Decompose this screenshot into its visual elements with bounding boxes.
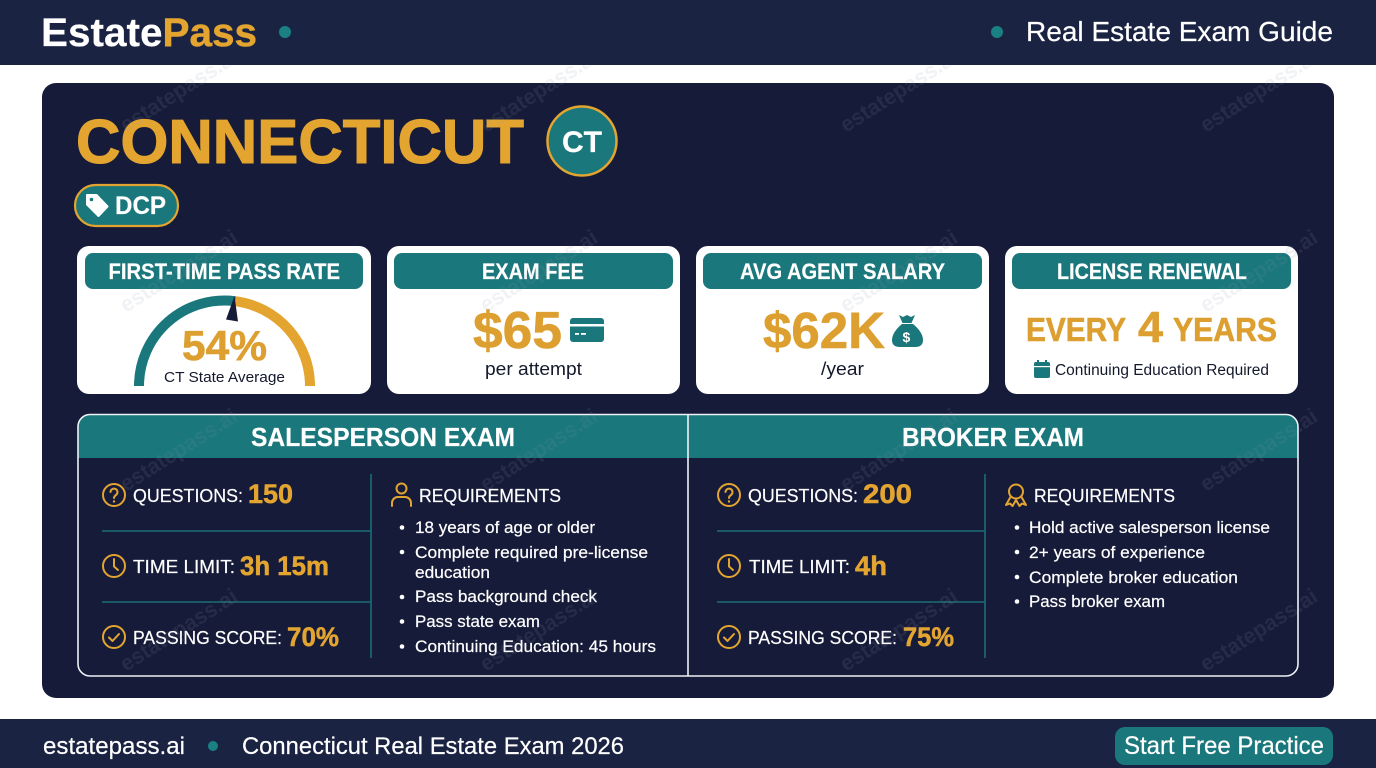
header bar	[0, 0, 1376, 65]
questions stat	[133, 479, 293, 509]
icon: clock	[718, 555, 740, 577]
exam comparison panel	[78, 414, 1298, 676]
requirements list: 18 years of age or older	[415, 519, 596, 537]
requirements list: 2+ years of experience	[1029, 544, 1205, 562]
watermarks: estatepass.ai	[115, 583, 242, 676]
icon: award ribbon	[1006, 484, 1026, 506]
title: state name: CONNECTICUT	[76, 108, 524, 177]
requirements list: Pass broker exam	[1029, 593, 1165, 611]
state code badge	[548, 106, 616, 176]
header dot right	[991, 26, 1003, 38]
watermarks: estatepass.ai	[835, 403, 962, 496]
watermarks: estatepass.ai	[835, 44, 962, 137]
requirements list: education	[415, 564, 490, 582]
watermarks	[115, 44, 1322, 676]
watermarks: estatepass.ai	[835, 224, 962, 317]
stat card: license renewal: 4	[1138, 303, 1164, 352]
stat card: average agent salary: $62K	[763, 302, 885, 359]
passing score stat: PASSING SCORE:	[748, 628, 897, 648]
questions stat: 150	[248, 479, 293, 509]
passing score stat	[748, 622, 954, 652]
logo: EstatePass: EstatePass	[41, 11, 257, 55]
stat card: license renewal: YEARS	[1173, 311, 1277, 348]
icon: credit card	[570, 318, 604, 342]
icon: calendar	[1034, 360, 1050, 378]
gauge needle	[226, 296, 238, 322]
questions stat	[748, 479, 912, 509]
requirements list: Complete required pre-license	[415, 544, 648, 562]
time limit stat	[133, 551, 329, 581]
watermarks: estatepass.ai	[1195, 44, 1322, 137]
icon: check	[103, 626, 125, 648]
stat card: license renewal: Continuing Education Required	[1055, 362, 1269, 379]
passing score stat: 75%	[903, 622, 954, 652]
stat card: average agent salary: AVG AGENT SALARY	[740, 259, 945, 284]
watermarks: estatepass.ai	[475, 224, 602, 317]
stat card: license renewal: EVERY	[1026, 311, 1126, 348]
passing score stat: 70%	[287, 622, 339, 652]
call-to-action button: Start Free Practice	[1124, 732, 1324, 760]
time limit stat: TIME LIMIT:	[133, 557, 235, 577]
footer bar	[0, 719, 1376, 768]
watermarks: estatepass.ai	[1195, 403, 1322, 496]
icon: check	[718, 626, 740, 648]
header subtitle: Real Estate Exam Guide	[1026, 16, 1333, 47]
requirements list: Continuing Education: 45 hours	[415, 638, 656, 656]
watermarks: estatepass.ai	[475, 403, 602, 496]
stat card: license renewal	[1005, 246, 1298, 394]
column: salesperson exam	[102, 422, 656, 658]
column: broker exam: REQUIREMENTS	[1034, 486, 1175, 506]
stat card: exam fee: per attempt	[485, 359, 582, 379]
time limit stat: 3h 15m	[240, 551, 329, 581]
time limit stat: 4h	[855, 551, 887, 581]
requirements list	[1015, 519, 1270, 611]
requirements list: Pass state exam	[415, 613, 540, 631]
stat card: first-time pass rate	[77, 246, 371, 394]
time limit stat	[749, 551, 887, 581]
icon: question	[718, 484, 740, 506]
icon: clock	[103, 555, 125, 577]
watermarks: estatepass.ai	[1195, 224, 1322, 317]
footer site name: estatepass.ai	[43, 733, 185, 760]
column: broker exam: BROKER EXAM	[902, 422, 1084, 452]
passing score stat: PASSING SCORE:	[133, 628, 282, 648]
footer dot	[208, 741, 218, 751]
stat card: exam fee	[387, 246, 680, 394]
state code badge: CT	[562, 126, 602, 159]
questions stat: QUESTIONS:	[748, 486, 858, 506]
column: salesperson exam: SALESPERSON EXAM	[251, 422, 515, 452]
stat card: exam fee: EXAM FEE	[482, 259, 584, 284]
requirements list: Hold active salesperson license	[1029, 519, 1270, 537]
stat card: average agent salary	[696, 246, 989, 394]
requirements list: Pass background check	[415, 588, 598, 606]
watermarks: estatepass.ai	[1195, 583, 1322, 676]
questions stat: 200	[863, 479, 912, 509]
column: salesperson exam: REQUIREMENTS	[419, 486, 561, 506]
main panel	[42, 83, 1334, 698]
watermarks: estatepass.ai	[115, 403, 242, 496]
icon: money bag: $	[902, 329, 910, 345]
watermarks: estatepass.ai	[475, 44, 602, 137]
stat card: exam fee: $65	[473, 302, 562, 360]
requirements list: Complete broker education	[1029, 569, 1238, 587]
icon: question	[103, 484, 125, 506]
stat card: first-time pass rate: 54%	[182, 322, 267, 369]
stat card: first-time pass rate: FIRST-TIME PASS RATE	[108, 259, 340, 284]
questions stat: QUESTIONS:	[133, 486, 243, 506]
regulator pill: DCP	[75, 185, 178, 226]
stat card: average agent salary: /year	[821, 359, 864, 379]
gauge chart	[139, 296, 310, 386]
passing score stat	[133, 622, 339, 652]
stat card: license renewal: LICENSE RENEWAL	[1057, 259, 1247, 284]
regulator pill: DCP: DCP	[115, 192, 166, 220]
column: broker exam	[717, 422, 1270, 658]
watermarks: estatepass.ai	[115, 224, 242, 317]
time limit stat: TIME LIMIT:	[749, 557, 850, 577]
footer title: Connecticut Real Estate Exam 2026	[242, 733, 624, 760]
watermarks: estatepass.ai	[475, 583, 602, 676]
header dot left	[279, 26, 291, 38]
requirements list	[400, 519, 656, 656]
icon: money bag	[892, 315, 923, 347]
icon: tag	[87, 195, 108, 216]
watermarks: estatepass.ai	[835, 583, 962, 676]
watermarks: estatepass.ai	[115, 44, 242, 137]
stat card: first-time pass rate: CT State Average	[164, 369, 285, 386]
icon: person	[392, 484, 411, 506]
